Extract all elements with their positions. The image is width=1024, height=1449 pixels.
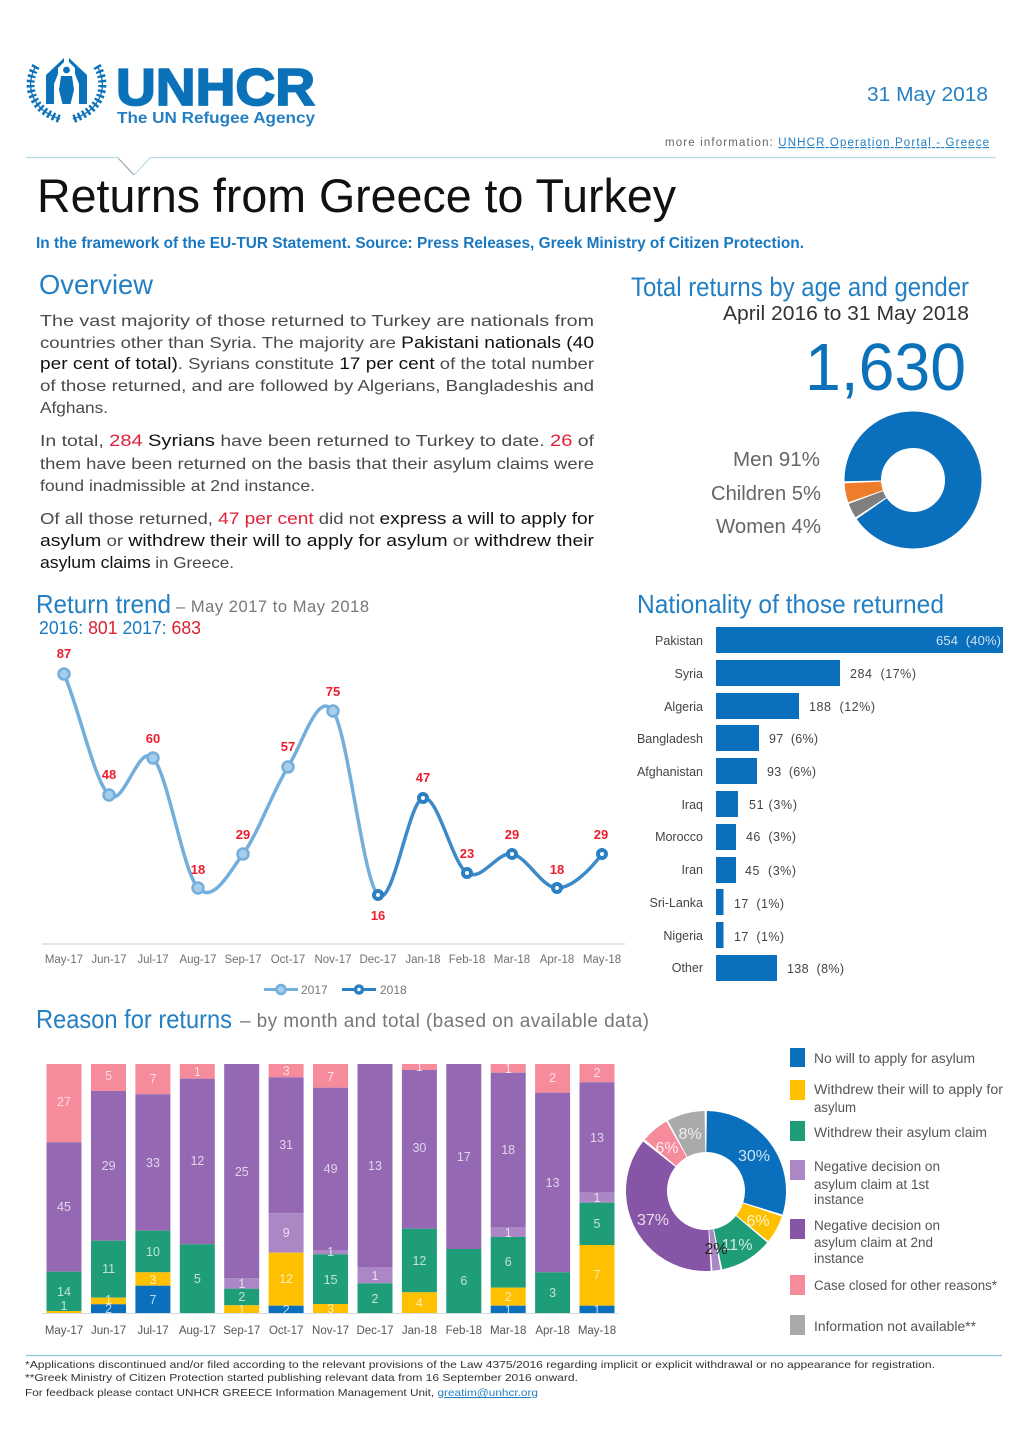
month axis labels: May-18 — [578, 1325, 616, 1337]
panel: return trend — [36, 589, 625, 997]
country labels: Bangladesh — [637, 732, 703, 746]
value labels: 93 (6%) — [767, 765, 816, 779]
legend item: withdrew will: Withdrew their will to apply for — [814, 1082, 1004, 1097]
bar May-17 — [46, 1064, 82, 1313]
bar Nov-17: 49 — [324, 1162, 338, 1176]
month axis labels: Apr-18 — [535, 1325, 570, 1337]
bar May-18: 13 — [590, 1131, 604, 1145]
bar Sep-17: 1 — [238, 1277, 245, 1291]
bar Jun-17: 1 — [105, 1293, 112, 1307]
month axis labels: May-18 — [583, 954, 621, 966]
bar Jan-18: 4 — [416, 1296, 423, 1310]
month axis labels: Jul-17 — [137, 954, 169, 966]
value labels: 17 (1%) — [734, 930, 784, 944]
month axis labels: May-17 — [45, 954, 83, 966]
legend item: withdrew claim — [790, 1121, 987, 1141]
bar May-18: 5 — [594, 1217, 601, 1231]
footer notes: For feedback please contact UNHCR GREECE Information Management Unit, greatim@unhcr.org — [25, 1387, 538, 1399]
month axis labels: Dec-17 — [359, 954, 397, 966]
bar Apr-18 — [535, 1064, 570, 1313]
subtitle: In the framework of the EU-TUR Statement. Source: Press Releases, Greek Ministry of Citizen Protection. — [36, 235, 804, 252]
data labels: 60 — [146, 731, 160, 746]
bar Dec-17: 2 — [372, 1292, 379, 1306]
donut percentage labels: 8% — [678, 1126, 702, 1143]
month axis labels: Jul-17 — [137, 1325, 169, 1337]
country labels: Sri-Lanka — [650, 896, 703, 910]
country labels: Syria — [675, 667, 703, 681]
country labels: Iraq — [681, 798, 703, 812]
month axis labels: Sep-17 — [223, 1325, 260, 1337]
legend item: withdrew will — [790, 1080, 1004, 1115]
donut percentage labels: 37% — [637, 1212, 669, 1229]
legend item: negative 2nd instance: asylum claim at 2nd — [814, 1235, 933, 1250]
value labels: 51 (3%) — [749, 798, 797, 812]
data labels: 18 — [191, 862, 205, 877]
value labels: 17 (1%) — [734, 897, 784, 911]
bar May-18: 7 — [594, 1268, 601, 1282]
value labels: 138 (8%) — [787, 962, 844, 976]
value labels — [734, 633, 1001, 976]
data labels — [57, 646, 608, 923]
legend item: closed: Case closed for other reasons* — [814, 1278, 998, 1293]
donut labels — [711, 449, 821, 538]
legend item: no will: No will to apply for asylum — [814, 1051, 975, 1066]
bars — [716, 627, 1003, 981]
paragraph 3: asylum claims in Greece. — [40, 554, 234, 572]
data labels: 23 — [460, 846, 474, 861]
paragraph 2: In total, 284 Syrians have been returned to Turkey to date. 26 of — [40, 432, 595, 450]
month axis labels — [45, 954, 621, 966]
bar Mar-18: 1 — [505, 1226, 512, 1240]
month axis labels: Dec-17 — [356, 1325, 394, 1337]
period: April 2016 to 31 May 2018 — [723, 303, 969, 325]
bar Oct-17: 31 — [279, 1138, 293, 1152]
value labels: 654 (40%) — [936, 633, 1001, 648]
legend item: negative 2nd instance: instance — [814, 1251, 864, 1266]
bar Oct-17: 9 — [283, 1226, 290, 1240]
country labels: Other — [672, 961, 703, 975]
bar Nov-17 — [313, 1064, 348, 1316]
paragraph 1: The vast majority of those returned to Turkey are nationals from — [40, 313, 594, 330]
legend item: negative 1st instance: instance — [814, 1192, 864, 1207]
panel: nationality of those returned — [637, 589, 1003, 981]
data labels: 75 — [326, 684, 340, 699]
bar Aug-17: 5 — [194, 1272, 201, 1286]
donut chart: reasons total — [622, 1107, 790, 1275]
bar Jan-18: 1 — [416, 1060, 423, 1074]
paragraph 1 — [40, 313, 595, 417]
donut percentage labels: 30% — [738, 1148, 770, 1165]
month axis labels: Jun-17 — [91, 954, 127, 966]
month axis labels: Feb-18 — [449, 954, 485, 966]
data labels: 29 — [505, 827, 519, 842]
bar Sep-17: 25 — [235, 1165, 249, 1179]
heading: reason for returns: Reason for returns — [36, 1004, 232, 1034]
bar Feb-18: 17 — [457, 1150, 471, 1164]
month axis labels: Jun-17 — [91, 1325, 126, 1337]
donut chart: gender — [843, 410, 983, 550]
bar Nov-17: 15 — [324, 1273, 338, 1287]
bar May-18: 2 — [594, 1066, 601, 1080]
bar Apr-18: 13 — [546, 1176, 560, 1190]
paragraph 1: Afghans. — [40, 400, 108, 417]
donut percentage labels: 11% — [722, 1237, 752, 1254]
bar Oct-17: 2 — [283, 1303, 290, 1317]
legend item: negative 2nd instance: Negative decision on — [814, 1218, 940, 1233]
legend item: closed — [790, 1275, 998, 1295]
bar Jun-17: 29 — [102, 1159, 116, 1173]
month axis labels: Nov-17 — [314, 954, 352, 966]
value labels: 284 (17%) — [850, 667, 916, 681]
bar Dec-17: 13 — [368, 1159, 382, 1173]
logo: UNHCR — [31, 58, 315, 127]
bar Aug-17 — [180, 1064, 215, 1313]
bar Nov-17: 7 — [327, 1070, 334, 1084]
bar May-18 — [580, 1064, 614, 1317]
heading: nationality: Nationality of those returned — [637, 589, 944, 619]
bar Jul-17: 7 — [150, 1293, 157, 1307]
bar Jun-17 — [91, 1064, 126, 1316]
country labels: Iran — [681, 863, 703, 877]
bar Jul-17: 10 — [146, 1245, 160, 1259]
bar May-17: 45 — [57, 1200, 71, 1214]
donut labels: Women 4% — [716, 516, 821, 538]
bar Jan-18 — [402, 1060, 437, 1313]
data labels: 48 — [102, 767, 116, 782]
month axis labels: Nov-17 — [312, 1325, 349, 1337]
month axis labels: Apr-18 — [540, 954, 574, 966]
line 2018 — [378, 798, 602, 896]
legend — [790, 1048, 1004, 1335]
country labels — [637, 634, 703, 975]
bar May-17: 1 — [61, 1299, 68, 1313]
horizontal bar chart — [637, 627, 1003, 981]
heading: return trend: Return trend — [36, 589, 171, 619]
bar Jul-17: 3 — [150, 1273, 157, 1287]
paragraph 1: countries other than Syria. The majority are Pakistani nationals (40 — [40, 334, 594, 352]
title: Returns from Greece to Turkey — [37, 169, 676, 222]
markers 2017 — [58, 668, 338, 894]
panel: reason for returns — [36, 1004, 1004, 1337]
footer notes — [25, 1359, 935, 1399]
header — [31, 58, 989, 149]
data labels: 47 — [416, 770, 430, 785]
chart legend: 2018 — [380, 983, 407, 997]
bar Mar-18: 1 — [505, 1062, 512, 1076]
icon: sheltering hands and wreath — [31, 58, 102, 119]
bar Jun-17: 2 — [105, 1302, 112, 1316]
paragraph 1: of those returned, and are followed by Algerians, Bangladeshis and — [40, 378, 594, 395]
bar Sep-17 — [224, 1064, 259, 1317]
legend item: negative 1st instance — [790, 1159, 940, 1207]
donut percentage labels: 6% — [655, 1140, 679, 1157]
bar May-17: 27 — [57, 1095, 71, 1109]
paragraph 3: asylum or withdrew their will to apply for asylum or withdrew their — [40, 532, 595, 550]
legend item: no will — [790, 1048, 975, 1067]
bar Nov-17: 1 — [327, 1245, 334, 1259]
line chart: monthly returns — [45, 646, 621, 966]
donut labels: Men 91% — [733, 449, 820, 471]
data labels: 29 — [594, 827, 608, 842]
bar Oct-17 — [269, 1064, 304, 1317]
donut percentage labels: 6% — [746, 1213, 770, 1230]
country labels: Pakistan — [655, 634, 703, 648]
bar Jan-18: 12 — [412, 1254, 426, 1268]
month axis labels: May-17 — [45, 1325, 83, 1337]
bar May-18: 1 — [594, 1303, 601, 1317]
data labels: 87 — [57, 646, 71, 661]
bar Oct-17: 12 — [279, 1272, 293, 1286]
annual totals: 2016: 801 2017: 683 — [39, 618, 201, 638]
month axis labels: Oct-17 — [271, 954, 305, 966]
country labels: Algeria — [664, 700, 703, 714]
bar May-18: 1 — [594, 1191, 601, 1205]
logo tagline: The UN Refugee Agency — [117, 110, 315, 127]
donut percentage labels — [637, 1126, 770, 1254]
bar Apr-18: 3 — [549, 1286, 556, 1300]
heading: overview: Overview — [39, 269, 154, 300]
bar Oct-17: 3 — [283, 1064, 290, 1078]
bar Jun-17: 5 — [105, 1069, 112, 1083]
period note: – May 2017 to May 2018 — [176, 598, 369, 616]
legend item: negative 1st instance: asylum claim at 1st — [814, 1177, 929, 1192]
panel: overview — [39, 269, 595, 572]
bar Mar-18: 1 — [505, 1303, 512, 1317]
bar Jul-17: 7 — [150, 1072, 157, 1086]
panel: total returns by age and gender — [631, 272, 983, 550]
country labels: Nigeria — [663, 929, 703, 943]
2% label: 2% — [704, 1241, 728, 1258]
markers 2018 — [374, 794, 606, 899]
paragraph 2 — [40, 432, 595, 495]
legend item: withdrew claim: Withdrew their asylum claim — [814, 1125, 987, 1140]
bar Dec-17 — [358, 1064, 392, 1313]
value labels: 45 (3%) — [745, 864, 796, 878]
month axis labels: Mar-18 — [490, 1325, 526, 1337]
footer notes: **Greek Ministry of Citizen Protection started publishing relevant data from 16 September 2016 onward. — [25, 1372, 578, 1384]
data labels: 57 — [281, 739, 295, 754]
more information link: more information: UNHCR Operation Portal - Greece — [665, 137, 989, 149]
month axis labels: Mar-18 — [494, 954, 530, 966]
month axis labels: Feb-18 — [446, 1325, 482, 1337]
value labels: 46 (3%) — [746, 830, 796, 844]
bar Mar-18: 6 — [505, 1255, 512, 1269]
heading note: – by month and total (based on available data) — [240, 1011, 649, 1032]
date: 31 May 2018 — [867, 83, 988, 106]
donut labels: Children 5% — [711, 483, 821, 505]
legend item: not available: Information not available** — [814, 1319, 977, 1334]
logo wordmark: UNHCR — [116, 59, 315, 117]
bar Jul-17: 33 — [146, 1156, 160, 1170]
month axis labels — [45, 1325, 616, 1337]
paragraph 1: per cent of total) . Syrians constitute 17 per cent of the total number — [40, 355, 595, 373]
bar Nov-17: 3 — [327, 1302, 334, 1316]
country labels: Morocco — [655, 830, 703, 844]
bar Mar-18: 2 — [505, 1290, 512, 1304]
month axis labels: Aug-17 — [179, 954, 217, 966]
value labels: 188 (12%) — [809, 700, 875, 714]
month axis labels: Jan-18 — [402, 1325, 437, 1337]
bar Sep-17: 2 — [238, 1290, 245, 1304]
data labels: 18 — [550, 862, 564, 877]
month axis labels: Jan-18 — [405, 954, 441, 966]
legend item: not available — [790, 1315, 977, 1335]
legend item: withdrew will: asylum — [814, 1100, 856, 1115]
bar Feb-18: 6 — [460, 1274, 467, 1288]
footer notes: *Applications discontinued and/or filed according to the relevant provisions of the Law 4375/2016 regarding implicit or explicit withdrawal or no appearance for registration. — [25, 1359, 935, 1371]
bar Aug-17: 1 — [194, 1065, 201, 1079]
bar Dec-17: 1 — [372, 1269, 379, 1283]
country labels: Afghanistan — [637, 765, 703, 779]
bar Sep-17: 1 — [238, 1303, 245, 1317]
chart legend: 2017 — [301, 983, 328, 997]
month axis labels: Oct-17 — [269, 1325, 303, 1337]
bar Jun-17: 11 — [102, 1262, 115, 1276]
bar Jul-17 — [135, 1064, 170, 1313]
bar Mar-18 — [491, 1062, 526, 1317]
value labels: 97 (6%) — [769, 732, 818, 746]
bar Jan-18: 30 — [412, 1141, 426, 1155]
bar Mar-18: 18 — [501, 1143, 515, 1157]
line 2017 — [64, 674, 378, 895]
paragraph 2: found inadmissible at 2nd instance. — [40, 478, 315, 495]
month axis labels: Aug-17 — [179, 1325, 216, 1337]
data labels: 16 — [371, 908, 385, 923]
chart legend — [264, 983, 407, 997]
bar May-17: 14 — [57, 1285, 71, 1299]
data labels: 29 — [236, 827, 250, 842]
paragraph 3: Of all those returned, 47 per cent did not express a will to apply for — [40, 510, 595, 528]
paragraph 3 — [40, 510, 595, 572]
month axis labels: Sep-17 — [224, 954, 262, 966]
bar Aug-17: 12 — [190, 1154, 204, 1168]
total number: 1,630 — [805, 330, 966, 405]
stacked bar chart — [45, 1060, 616, 1337]
legend item: negative 1st instance: Negative decision on — [814, 1159, 940, 1174]
heading: total returns: Total returns by age and gender — [631, 272, 969, 302]
bar Feb-18 — [446, 1064, 481, 1313]
legend item: negative 2nd instance — [790, 1218, 940, 1266]
bar Apr-18: 2 — [549, 1071, 556, 1085]
paragraph 2: them have been returned on the basis that their asylum claims were — [40, 456, 594, 473]
